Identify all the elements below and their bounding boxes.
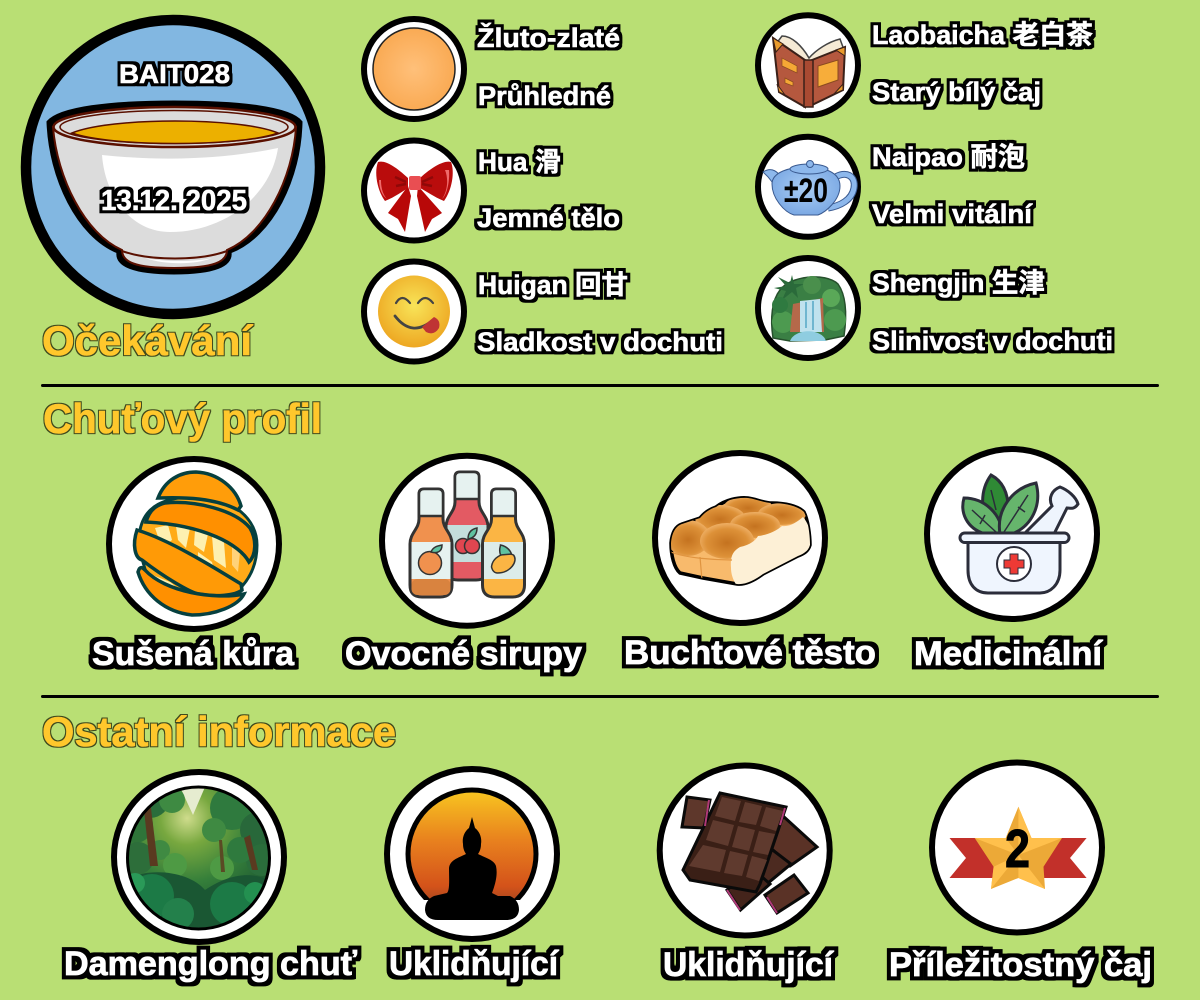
Chinese term label: Shengjin 生津 [872,268,1045,298]
item: mood [387,769,560,983]
clarity label: Průhledné [478,81,611,111]
icon: meditating Buddha [387,769,557,939]
item: fruit syrups [345,456,582,673]
icon: chocolate pieces [660,766,830,936]
item: salivation [758,258,1113,358]
label: Medicinální [914,635,1104,673]
Chinese term label: Laobaicha 老白茶 [872,20,1093,50]
item: medicinal [914,449,1104,673]
item: aftertaste [364,262,723,362]
colour label: Žluto-zlaté [477,23,620,53]
icon: star ribbon [932,762,1102,932]
item: brewing [758,137,1034,237]
heading: expectation: Očekávání [42,317,253,364]
label: Ovocné sirupy [345,635,582,673]
item: chocolate note [660,766,835,984]
Chinese term label: Huigan 回甘 [478,270,628,300]
label: Příležitostný čaj [889,946,1152,984]
icon: red bow [364,140,464,240]
icon: syrup bottles [382,456,552,626]
item: occasion [889,762,1152,984]
icon: blue teapot [758,137,858,237]
icon: tea bowl [48,102,301,273]
icon: forest scene [114,772,284,942]
left bottle [410,489,452,597]
Chinese term label: Hua 滑 [478,147,561,177]
icon: colour swatch [364,19,464,119]
middle bottle [446,472,488,580]
icon: old book [758,15,858,115]
meaning label: Starý bílý čaj [872,77,1041,107]
meaning label: Jemné tělo [477,203,620,233]
infusion count: ±20 [784,172,828,210]
item: body [364,140,620,240]
icon: smiling face [364,262,464,362]
label: Damenglong chuť [64,945,358,983]
item: bun dough [624,453,876,672]
right bottle [482,489,524,597]
date: 13.12. 2025 [101,185,247,217]
item: tea type [758,15,1093,115]
label: Uklidňující [663,946,835,984]
icon: jungle waterfall [758,258,858,358]
item: origin [64,772,358,983]
tea code: BAIT028 [119,59,230,89]
Chinese term label: Naipao 耐泡 [872,142,1025,172]
badge circle [26,20,320,314]
heading: other information: Ostatní informace [42,708,396,755]
label: Buchtové těsto [624,634,876,672]
label: Sušená kůra [92,635,295,673]
panel: tea badge [26,20,320,314]
meaning label: Sladkost v dochuti [477,327,723,357]
icon: mortar and herbs [927,449,1097,619]
icon: bread loaf [655,453,825,623]
item: colour [364,19,620,119]
rank number: 2 [1005,819,1030,879]
item: dried peel [92,459,295,673]
meaning label: Slinivost v dochuti [872,326,1113,356]
icon: peeled orange [109,459,279,629]
heading: flavour profile: Chuťový profil [43,395,322,442]
label: Uklidňující [389,945,560,983]
meaning label: Velmi vitální [872,199,1034,229]
